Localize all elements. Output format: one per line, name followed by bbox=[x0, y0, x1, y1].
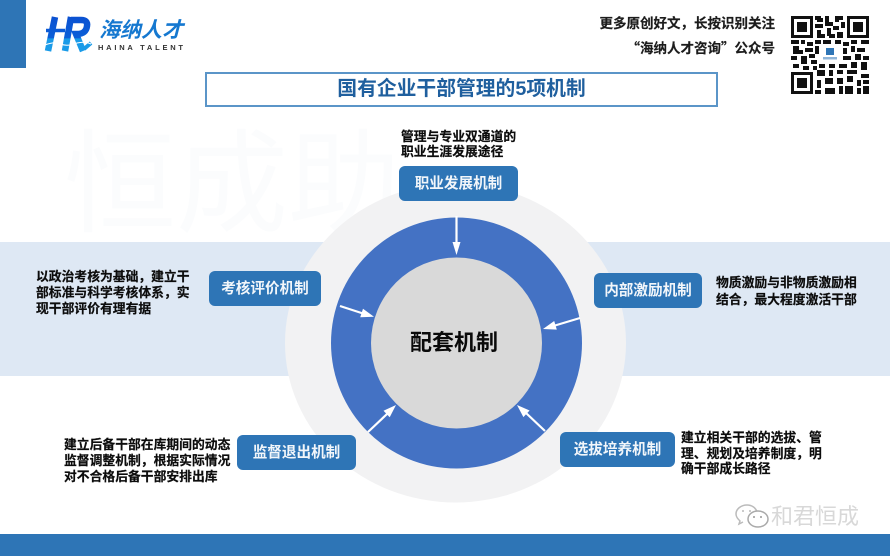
text: supervision bbox=[64, 437, 230, 484]
button: supervision bbox=[237, 435, 356, 470]
text: career development: 管理与专业双通道的 bbox=[401, 129, 516, 144]
watermark: background characters: 恒成助 bbox=[64, 122, 400, 247]
button: assessment: 考核评价机制 bbox=[221, 281, 309, 297]
diagram: concentric circles and arrows bbox=[285, 192, 626, 502]
text: incentives: 结合，最大程度激活干部 bbox=[716, 292, 857, 306]
button: supervision: 监督退出机制 bbox=[253, 445, 340, 461]
button: career development bbox=[399, 166, 518, 201]
text: assessment: 现干部评价有理有据 bbox=[36, 301, 151, 316]
center label: 配套机制 bbox=[410, 330, 498, 355]
logo: Haina Talent: 海纳人才 bbox=[99, 19, 186, 42]
text: career development: 职业生涯发展途径 bbox=[401, 144, 503, 159]
logo: Haina Talent: HAINA TALENT bbox=[98, 43, 183, 52]
footer bar bbox=[0, 534, 890, 556]
text: supervision: 建立后备干部在库期间的动态 bbox=[64, 437, 230, 452]
text: selection: 确干部成长路径 bbox=[681, 461, 771, 476]
text: incentives: 物质激励与非物质激励相 bbox=[716, 275, 857, 290]
title: 国有企业干部管理的5项机制 bbox=[337, 78, 586, 100]
button: selection bbox=[560, 432, 675, 467]
text: assessment: 部标准与科学考核体系，实 bbox=[36, 285, 190, 300]
watermark: WeChat account: 和君恒成 bbox=[771, 504, 859, 529]
button: career development: 职业发展机制 bbox=[415, 176, 502, 192]
text: assessment bbox=[36, 269, 190, 316]
text: selection bbox=[681, 430, 822, 476]
text: supervision: 对不合格后备干部安排出库 bbox=[64, 469, 218, 484]
text: assessment: 以政治考核为基础，建立干 bbox=[36, 269, 190, 284]
corner block: top left bbox=[0, 0, 26, 68]
text: career development bbox=[401, 129, 516, 159]
button: incentives: 内部激励机制 bbox=[604, 283, 692, 299]
logo: Haina Talent bbox=[44, 16, 186, 52]
icon: QR code bbox=[791, 16, 869, 94]
button: incentives bbox=[594, 273, 702, 308]
text: selection: 建立相关干部的选拔、管 bbox=[681, 430, 822, 445]
header note: follow the account: 更多原创好文，长按识别关注 bbox=[600, 12, 775, 32]
header note: account name: “海纳人才咨询”公众号 bbox=[626, 37, 775, 57]
text: incentives bbox=[716, 275, 857, 306]
button: assessment bbox=[209, 271, 321, 306]
button: selection: 选拔培养机制 bbox=[574, 442, 661, 458]
text: selection: 理、规划及培养制度，明 bbox=[681, 446, 822, 461]
band: light blue background bbox=[0, 242, 890, 376]
title bbox=[205, 72, 718, 107]
text: supervision: 监督调整机制，根据实际情况 bbox=[64, 453, 230, 468]
